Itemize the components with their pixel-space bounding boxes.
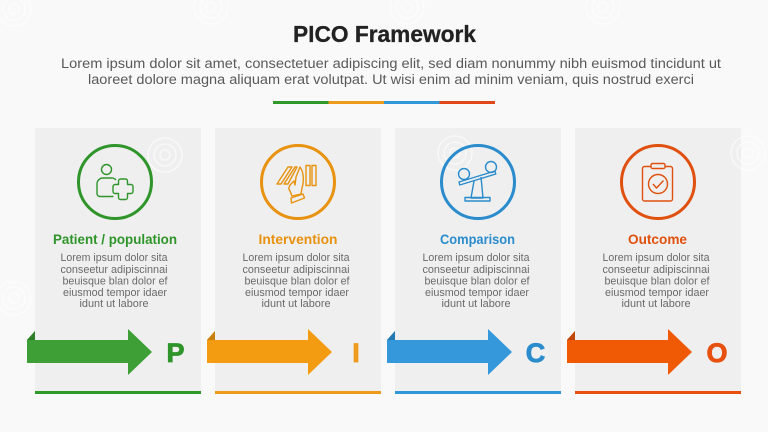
panel: comparison: [387, 128, 561, 394]
arrow: green: [27, 329, 152, 375]
body text: comparison: conseetur adipiscinnai: [422, 264, 530, 276]
letter O: O: [706, 338, 728, 368]
body text: intervention: [242, 252, 350, 310]
body text: patient: conseetur adipiscinnai: [60, 264, 168, 276]
panel bottom bar: orange: [215, 391, 381, 394]
subtitle text: laoreet dolore magna aliquam erat volutpat. Ut wisi enim ad minim veniam, quis nostrud exerci: [88, 72, 694, 88]
heading: intervention: Intervention: [258, 231, 338, 247]
icon: balance scale: [442, 146, 514, 218]
body text: intervention: beuisque blan dolor ef: [244, 276, 350, 288]
body text: outcome: conseetur adipiscinnai: [602, 264, 710, 276]
heading: patient / population: Patient / population: [53, 231, 177, 247]
body text: comparison: beuisque blan dolor ef: [424, 276, 530, 288]
divider: four colour bar: [273, 101, 495, 104]
body text: intervention: Lorem ipsum dolor sita: [242, 252, 350, 264]
arrow: blue: [387, 329, 512, 375]
heading: outcome: Outcome: [628, 231, 687, 247]
body text: patient: Lorem ipsum dolor sita: [60, 252, 168, 264]
body text: intervention: conseetur adipiscinnai: [242, 264, 350, 276]
body text: outcome: eiusmod tempor idaer: [605, 287, 709, 299]
arrow: orange: [207, 329, 332, 375]
body text: intervention: eiusmod tempor idaer: [245, 287, 349, 299]
letter I: I: [352, 338, 360, 368]
heading: comparison: Comparison: [440, 231, 515, 247]
body text: outcome: beuisque blan dolor ef: [604, 276, 710, 288]
body text: comparison: [422, 252, 530, 310]
body text: patient: [60, 252, 168, 310]
subtitle text: Lorem ipsum dolor sit amet, consectetuer adipiscing elit, sed diam nonummy nibh euismod tincidunt ut: [61, 56, 721, 72]
panel: intervention: [207, 128, 381, 394]
letter C: C: [526, 338, 545, 368]
body text: outcome: Lorem ipsum dolor sita: [602, 252, 710, 264]
icon: patient with plus: [78, 146, 152, 218]
subtitle text: [61, 56, 721, 88]
body text: patient: eiusmod tempor idaer: [63, 287, 167, 299]
letter P: P: [166, 338, 185, 368]
body text: comparison: Lorem ipsum dolor sita: [422, 252, 530, 264]
body text: patient: idunt ut labore: [80, 298, 148, 310]
panel bottom bar: green: [35, 391, 201, 394]
panel: patient / population: [27, 128, 201, 394]
panel: outcome: [567, 128, 765, 394]
title: PICO Framework: [293, 21, 476, 47]
body text: comparison: idunt ut labore: [442, 298, 510, 310]
icon: hand and dominoes: [262, 146, 334, 218]
body text: outcome: [602, 252, 710, 310]
body text: patient: beuisque blan dolor ef: [62, 276, 168, 288]
arrow: red: [567, 329, 692, 375]
icon: clipboard check: [622, 146, 694, 218]
body text: intervention: idunt ut labore: [262, 298, 330, 310]
panel bottom bar: red: [575, 391, 741, 394]
panel bottom bar: blue: [395, 391, 561, 394]
body text: outcome: idunt ut labore: [622, 298, 690, 310]
body text: comparison: eiusmod tempor idaer: [425, 287, 529, 299]
